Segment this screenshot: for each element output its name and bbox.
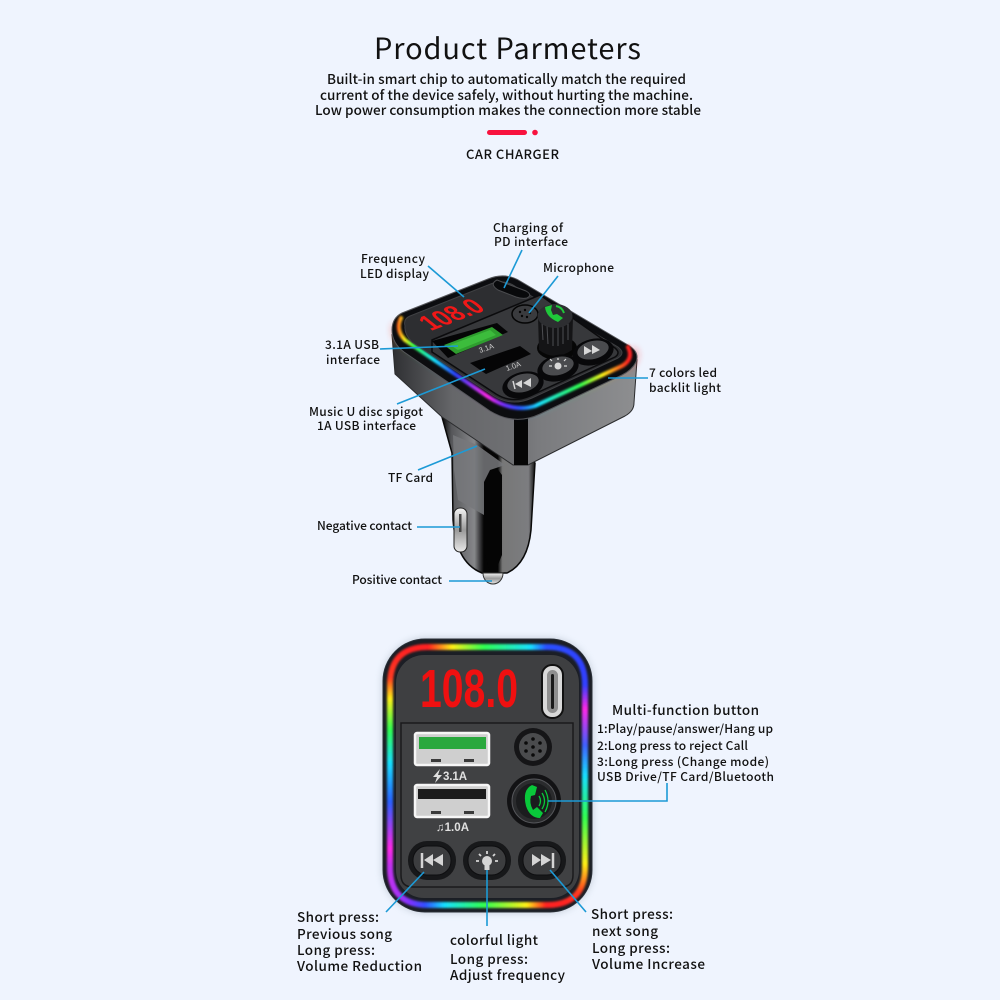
subtitle: CAR CHARGER	[466, 144, 559, 163]
button: light	[534, 350, 582, 386]
inner face	[405, 282, 622, 402]
label: multi-function button: Multi-function button	[612, 699, 759, 719]
label: multi-function button	[597, 699, 774, 785]
leader: multi-function button	[548, 783, 667, 801]
description text: Low power consumption makes the connection more stable	[315, 99, 701, 119]
1A USB port: 1.0A	[504, 359, 522, 373]
description text: Built-in smart chip to automatically match the required	[327, 68, 686, 88]
label: PD interface	[493, 219, 568, 250]
leader: 3.1A USB	[380, 346, 458, 349]
label: frequency display	[360, 250, 429, 282]
leader: microphone	[529, 276, 558, 313]
label: previous button: Short press:	[297, 906, 379, 926]
label 3.1A: 3.1A	[443, 771, 467, 783]
label: next button: next song	[592, 920, 658, 940]
label: LED backlight: 7 colors led	[649, 364, 717, 381]
top face rim	[392, 276, 637, 419]
microphone	[514, 728, 552, 766]
label: multi-function button: 2:Long press to reject Call	[597, 737, 748, 754]
title: Product Parmeters	[374, 26, 641, 68]
frequency digits: 108.0	[420, 659, 518, 719]
LED backlight strip	[399, 318, 630, 408]
3.1A USB port	[432, 323, 508, 358]
red accent divider	[487, 130, 538, 135]
label: negative contact: Negative contact	[317, 517, 412, 534]
label: light button: colorful light	[450, 929, 539, 949]
label: next button: Volume Increase	[591, 953, 705, 973]
label: previous button: Volume Reduction	[296, 955, 422, 975]
front body	[383, 639, 592, 912]
label: PD interface: Charging of	[493, 219, 564, 236]
label: PD interface: PD interface	[494, 233, 568, 250]
product: front view	[383, 639, 592, 912]
label: next button	[591, 903, 705, 973]
product: car charger angled view	[392, 276, 637, 584]
button: previous	[499, 367, 547, 403]
USB port 3.1A	[415, 733, 489, 765]
callouts: angled view	[309, 219, 721, 588]
plug barrel	[442, 417, 535, 573]
leader: frequency display	[428, 266, 464, 297]
label: TF card: TF Card	[388, 469, 433, 486]
LED ring	[390, 647, 585, 905]
label: 3.1A USB: 3.1A USB	[325, 336, 379, 353]
description text	[315, 68, 701, 119]
label: light button: Long press:	[450, 948, 528, 968]
leader: light button	[486, 870, 488, 926]
label: multi-function button: 1:Play/pause/answer/Hang up	[597, 720, 773, 737]
lower panel	[432, 295, 618, 400]
button: colorful light	[463, 841, 511, 880]
positive contact	[483, 573, 503, 584]
leader: TF card	[418, 446, 477, 470]
label: LED backlight: backlit light	[649, 379, 721, 396]
label: previous button	[296, 906, 422, 975]
button: next	[518, 841, 566, 880]
label: frequency display: LED display	[360, 265, 429, 282]
label: LED backlight	[649, 364, 721, 396]
label: microphone: Microphone	[543, 259, 614, 276]
button: next	[569, 334, 617, 370]
microphone	[512, 305, 538, 323]
3.1A USB port: 3.1A	[477, 341, 495, 355]
description text: current of the device safely, without hurting the machine.	[320, 84, 693, 104]
LED halo	[396, 325, 633, 410]
label: frequency display: Frequency	[361, 250, 425, 267]
knob	[537, 304, 577, 360]
label: music USB	[309, 403, 423, 434]
label: previous button: Previous song	[297, 923, 392, 943]
label 1.0A: ♫1.0A	[436, 822, 469, 834]
inner panel	[401, 723, 573, 887]
label: music USB: Music U disc spigot	[309, 403, 423, 420]
body front seam	[514, 418, 528, 465]
face	[396, 655, 579, 898]
label: 3.1A USB	[325, 336, 380, 368]
leader: PD interface	[504, 250, 522, 288]
label: multi-function button: USB Drive/TF Card/Bluetooth	[597, 768, 774, 785]
label: light button: Adjust frequency	[450, 964, 566, 984]
label: light button	[450, 929, 566, 984]
label: positive contact: Positive contact	[352, 571, 442, 588]
plug seam	[485, 463, 502, 572]
label: 3.1A USB: interface	[326, 351, 380, 368]
USB port 1.0A	[415, 785, 489, 817]
TF card slot panel	[453, 435, 505, 515]
LED outer glow	[386, 642, 589, 909]
leader: music USB	[397, 369, 485, 404]
label: music USB: 1A USB interface	[317, 417, 416, 434]
label: previous button: Long press:	[297, 939, 375, 959]
multi-function knob	[507, 774, 561, 828]
label: next button: Short press:	[591, 903, 673, 923]
label 3.1A	[433, 769, 467, 783]
label: next button: Long press:	[592, 937, 670, 957]
leader: LED backlight	[608, 377, 648, 379]
leader: positive contact	[449, 580, 492, 582]
frequency display: 108.0	[412, 295, 492, 335]
leader: negative contact	[417, 526, 460, 528]
body sides	[392, 335, 637, 465]
negative contact	[454, 508, 467, 552]
1A USB port	[470, 346, 531, 374]
leader: next button	[550, 870, 586, 912]
button: previous	[408, 841, 456, 880]
leader: previous button	[386, 872, 424, 912]
callouts: front view	[296, 699, 774, 984]
label: multi-function button: 3:Long press (Change mode)	[597, 753, 769, 770]
USB-C port	[542, 665, 563, 718]
PD port	[493, 280, 530, 298]
